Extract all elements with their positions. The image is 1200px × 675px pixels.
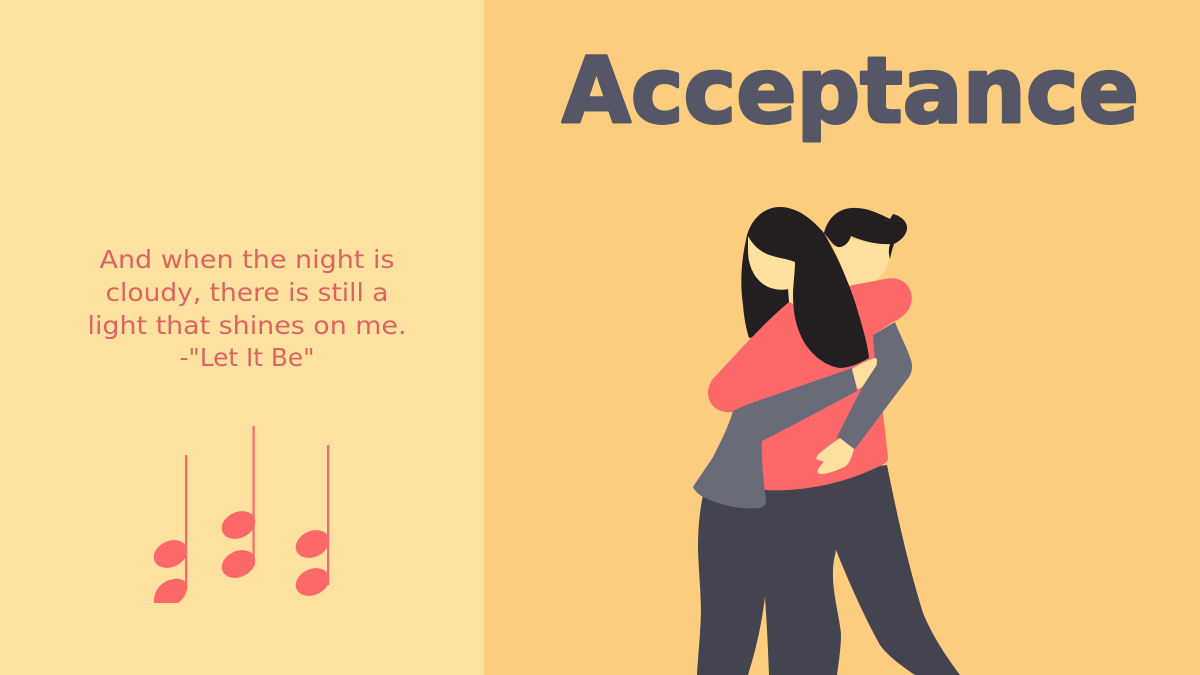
trousers xyxy=(697,465,960,675)
icon: music notes xyxy=(149,426,334,603)
man's hand xyxy=(816,438,854,474)
woman's front hair xyxy=(748,207,869,368)
man's grey arm xyxy=(837,322,912,449)
woman's face and neck xyxy=(748,236,796,305)
quote text: light that shines on me. xyxy=(88,311,406,340)
quote text xyxy=(88,245,406,372)
woman's grey sleeve xyxy=(693,368,857,508)
man's neck and face xyxy=(833,238,890,290)
red top and arm xyxy=(708,278,912,490)
icon: third music note xyxy=(291,445,334,601)
woman's back hair xyxy=(741,207,805,338)
quote text: cloudy, there is still a xyxy=(106,278,388,307)
title: Acceptance xyxy=(562,39,1139,144)
panel: left quote panel xyxy=(0,0,484,675)
quote text: And when the night is xyxy=(100,245,394,274)
illustration: hugging couple xyxy=(693,207,960,675)
woman's hand xyxy=(852,358,877,389)
quote text: -"Let It Be" xyxy=(180,343,314,372)
icon: second music note xyxy=(217,426,260,583)
man's hair xyxy=(824,208,907,259)
icon: first music note xyxy=(149,455,192,603)
